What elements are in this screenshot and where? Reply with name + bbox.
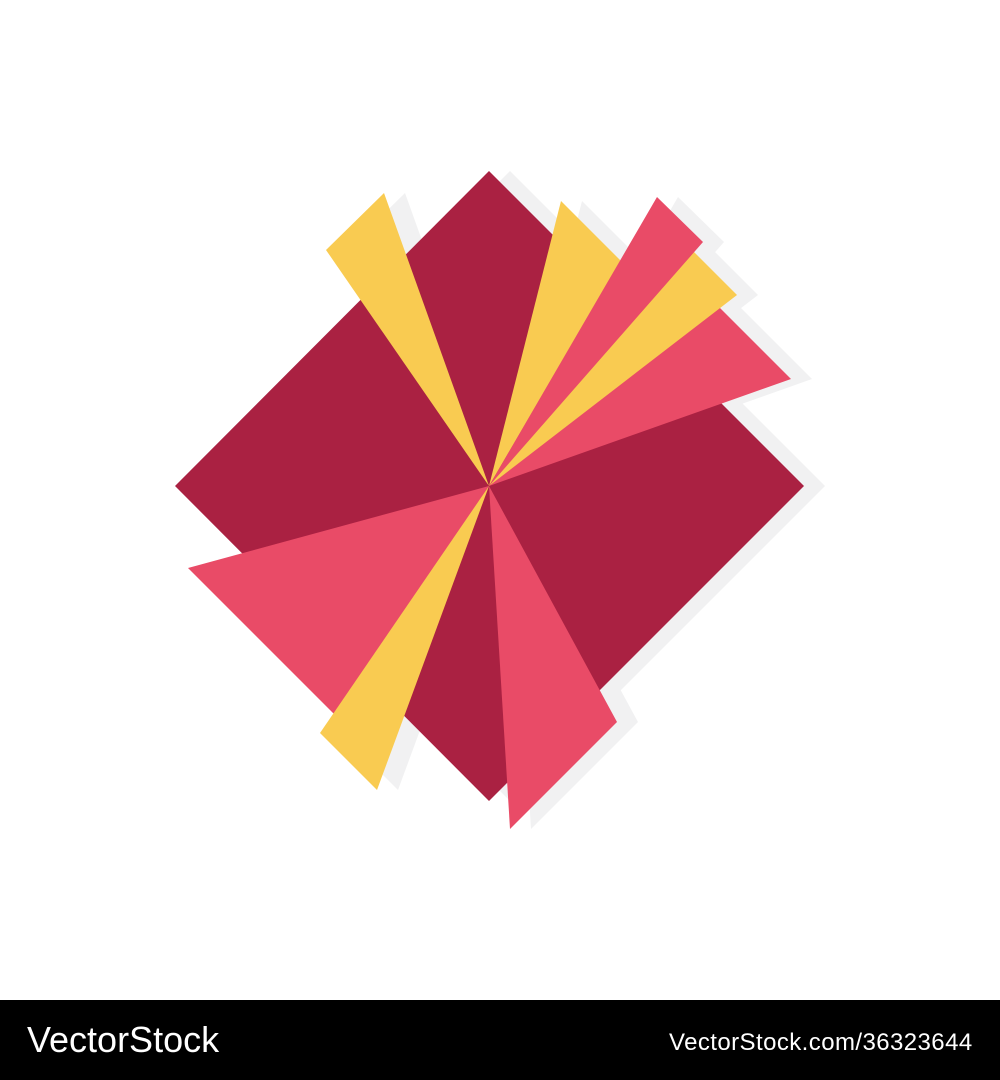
yellow wedge: upper right xyxy=(489,248,737,486)
pink wedge: right xyxy=(489,303,791,486)
yellow wedge: bottom left xyxy=(320,486,489,790)
brand name: VectorStock xyxy=(27,1019,219,1060)
drop shadow: silhouette offset to the right xyxy=(196,171,825,829)
pink wedge: lower left xyxy=(188,486,489,720)
pink wedge: upper right xyxy=(489,197,703,486)
yellow wedge: top left xyxy=(326,193,489,486)
footer bar xyxy=(0,1000,1000,1080)
dark red diamond xyxy=(175,171,804,801)
image url: VectorStock.com/36323644 xyxy=(669,1029,973,1056)
pink wedge: bottom xyxy=(489,486,617,829)
yellow wedge: top xyxy=(489,201,621,486)
